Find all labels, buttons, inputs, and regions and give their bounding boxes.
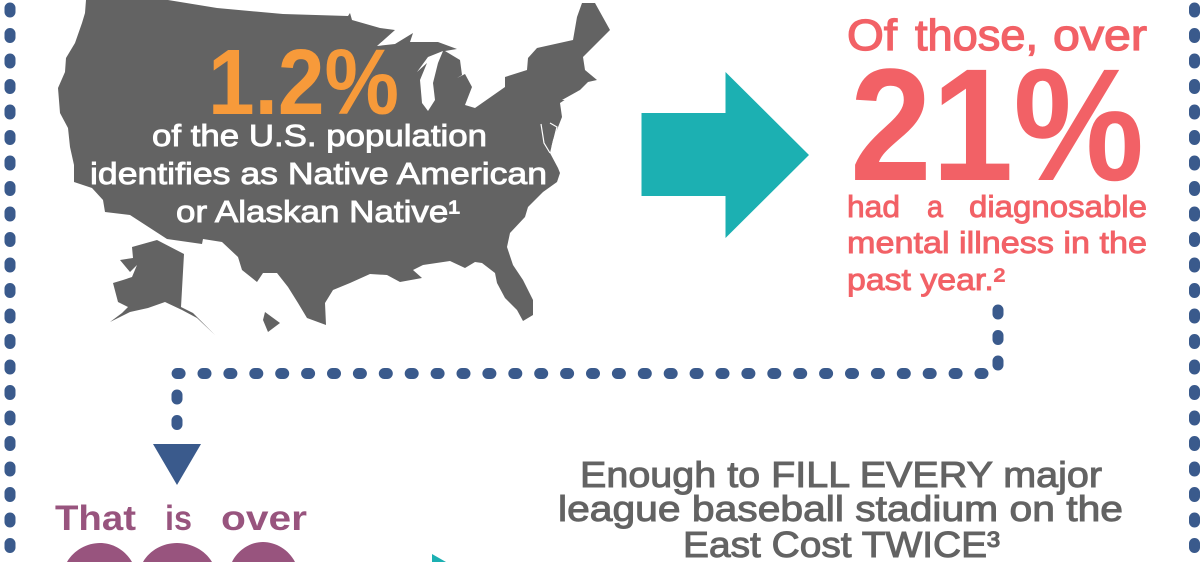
panel: U.S. population	[58, 0, 610, 335]
arrow: blue down triangle	[153, 444, 201, 485]
text: diagnosable mental illness: had	[847, 189, 900, 224]
arrow: teal right arrow	[642, 72, 809, 238]
heading: That is over: over	[221, 499, 307, 538]
heading: That is over: That	[55, 499, 136, 538]
stat: 1.2%: 1.2%	[208, 30, 399, 134]
text: population description: or Alaskan Native¹	[176, 194, 460, 229]
text: diagnosable mental illness: a	[927, 189, 944, 224]
icon: map of the United States	[58, 0, 610, 335]
stat: 21%: 21%	[850, 35, 1144, 214]
heading: Of those, over: over	[1053, 11, 1147, 60]
panel: That is over	[55, 499, 307, 562]
text: diagnosable mental illness	[847, 189, 1147, 297]
panel: mental illness statistic	[847, 11, 1147, 297]
heading: Of those, over	[847, 11, 1147, 60]
heading: Of those, over: those,	[915, 11, 1038, 60]
text: population description	[90, 118, 547, 229]
heading: That is over	[55, 499, 307, 538]
text: population description: of the U.S. population	[152, 118, 487, 153]
text: diagnosable mental illness: mental illness in the	[847, 225, 1147, 260]
text: stadium comparison: league baseball stadium on the	[558, 488, 1123, 529]
connector: dotted line from statistic to next step	[176, 310, 998, 446]
text: diagnosable mental illness: diagnosable	[969, 189, 1147, 224]
heading: Of those, over: Of	[847, 11, 898, 60]
text: stadium comparison: Enough to FILL EVERY major	[580, 454, 1102, 495]
text: stadium comparison	[558, 454, 1123, 562]
heading: That is over: is	[165, 499, 192, 538]
text: population description: identifies as Native American	[90, 156, 547, 191]
stat: cropped large numerals	[67, 542, 295, 562]
arrow: cropped teal arrow	[432, 554, 446, 562]
text: diagnosable mental illness: past year.²	[847, 262, 1005, 297]
